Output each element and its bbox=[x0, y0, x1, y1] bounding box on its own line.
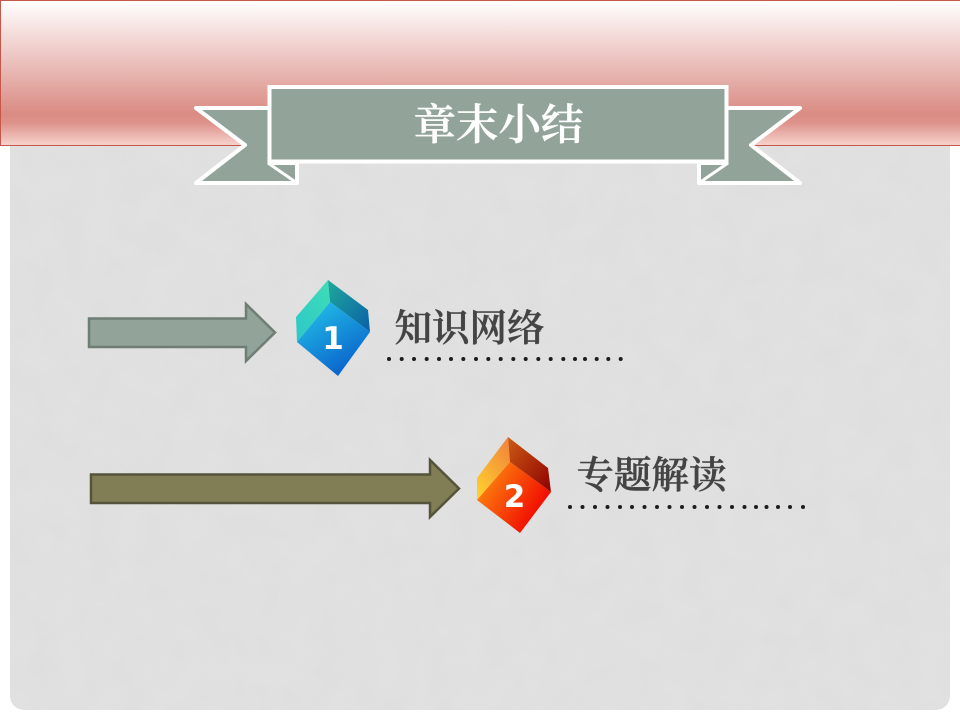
ribbon main panel bbox=[270, 87, 726, 162]
heading: 专题解读: 专题解读 bbox=[576, 454, 728, 496]
ribbon right tail bbox=[699, 108, 800, 183]
title ribbon bbox=[196, 87, 800, 183]
dotted leader 1 bbox=[387, 357, 623, 361]
header band bbox=[0, 0, 960, 146]
heading: 知识网络: 知识网络 bbox=[394, 307, 544, 349]
arrow 1 bbox=[89, 304, 275, 361]
ribbon left fold bbox=[268, 163, 297, 183]
gem icon 2 bbox=[477, 437, 551, 533]
arrow 2 bbox=[91, 460, 459, 517]
ribbon title text: 章末小结 bbox=[413, 102, 584, 150]
gem icon 1 bbox=[296, 280, 370, 376]
number 1: 1 bbox=[322, 321, 344, 357]
background panel bbox=[10, 130, 950, 710]
number 2: 2 bbox=[504, 479, 525, 515]
ribbon left tail bbox=[196, 108, 297, 183]
dotted leader 2 bbox=[568, 505, 805, 509]
ribbon right fold bbox=[699, 163, 728, 183]
